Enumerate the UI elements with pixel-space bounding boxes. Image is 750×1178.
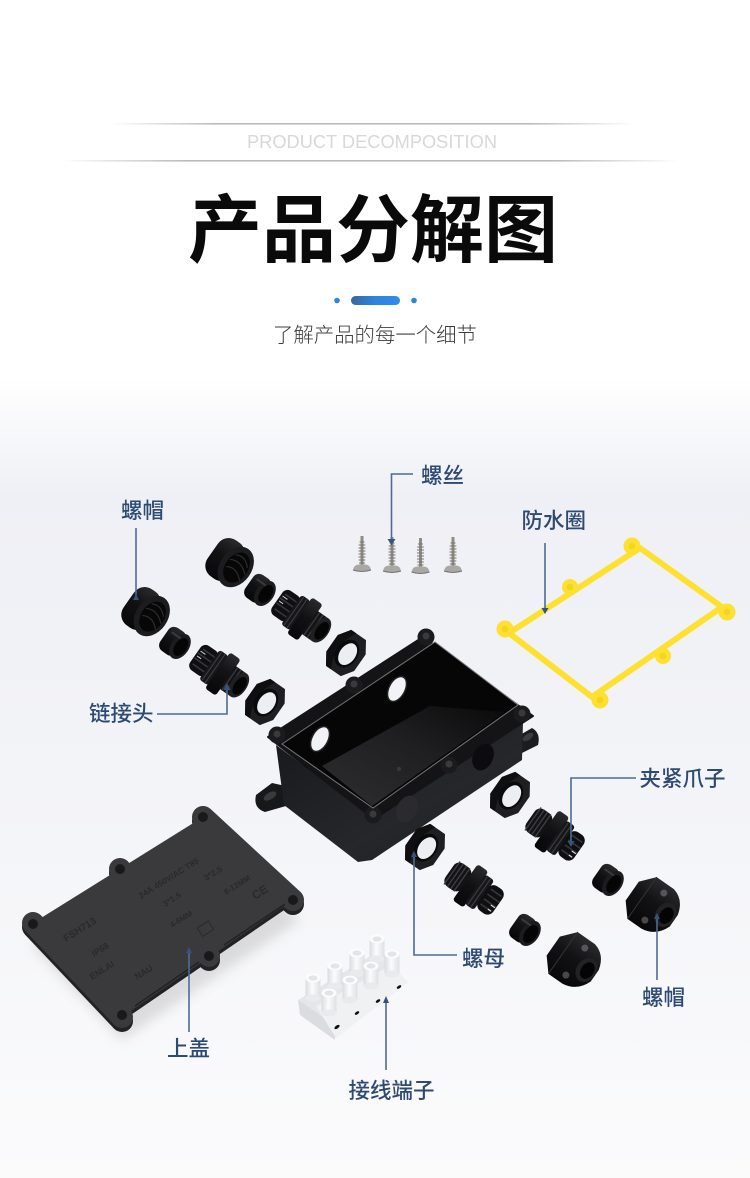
callout: top cover: 上盖 (167, 1037, 210, 1061)
engraved markings: 3*2.5 (202, 864, 224, 883)
callout: waterproof ring: 防水圈 (522, 509, 586, 533)
engraved markings: FSH713 (62, 916, 99, 945)
engraved markings: NAU (133, 963, 155, 982)
engraved markings: CE (249, 882, 271, 903)
lower cable gland set (116, 582, 292, 730)
upper cable gland set (200, 533, 373, 681)
callout: nut cap right: 螺帽 (642, 986, 685, 1010)
callout: screws: 螺丝 (421, 464, 464, 488)
back wall holes (307, 723, 333, 755)
callout: nut (411, 851, 505, 971)
tagline: 了解产品的每一个细节 (273, 324, 477, 347)
callout: terminal block (348, 996, 435, 1103)
mounting tabs (255, 783, 290, 812)
callout: clamping claw: 夹紧爪子 (640, 767, 726, 791)
cover edge thickness (33, 821, 293, 1021)
callout: waterproof ring (522, 509, 586, 614)
callout: clamping claw (568, 767, 726, 847)
engraved markings: 3*1.5 (161, 890, 183, 909)
right front cable gland set (398, 819, 610, 996)
right rear cable gland set (483, 767, 689, 941)
subtitle english: PRODUCT DECOMPOSITION (247, 131, 497, 152)
decorative pill and dots (334, 296, 417, 305)
callout: connector: 链接头 (89, 702, 154, 726)
box body (276, 722, 523, 862)
callout: nut cap left (121, 499, 164, 600)
cavity (282, 642, 518, 808)
callout: nut cap left: 螺帽 (121, 499, 164, 523)
title: 产品分解图 (188, 189, 558, 272)
callout: nut cap right (642, 913, 685, 1010)
callout: screws (388, 464, 464, 545)
side holes (468, 740, 498, 774)
engraved markings: 4-8MM (168, 909, 194, 930)
top cover (28, 812, 300, 1040)
callout: connector (89, 683, 230, 726)
callout: top cover (167, 947, 210, 1061)
waterproof gasket (496, 538, 736, 708)
engraved markings: 8-12MM (222, 873, 252, 897)
engraved markings: IP68 (90, 940, 111, 959)
exploded product diagram (28, 533, 736, 1040)
junction box (255, 628, 539, 862)
rim and lugs (268, 637, 533, 819)
screws (353, 536, 462, 574)
callout: nut: 螺母 (462, 947, 505, 971)
terminal block (298, 934, 408, 1040)
cover top face (33, 817, 293, 1017)
engraved markings: 24A 450V/AC T85 (137, 855, 201, 901)
engraved markings (62, 855, 271, 982)
callout: terminal block: 接线端子 (348, 1079, 435, 1103)
header block (60, 123, 680, 347)
engraved markings: ENLAI (88, 959, 116, 982)
